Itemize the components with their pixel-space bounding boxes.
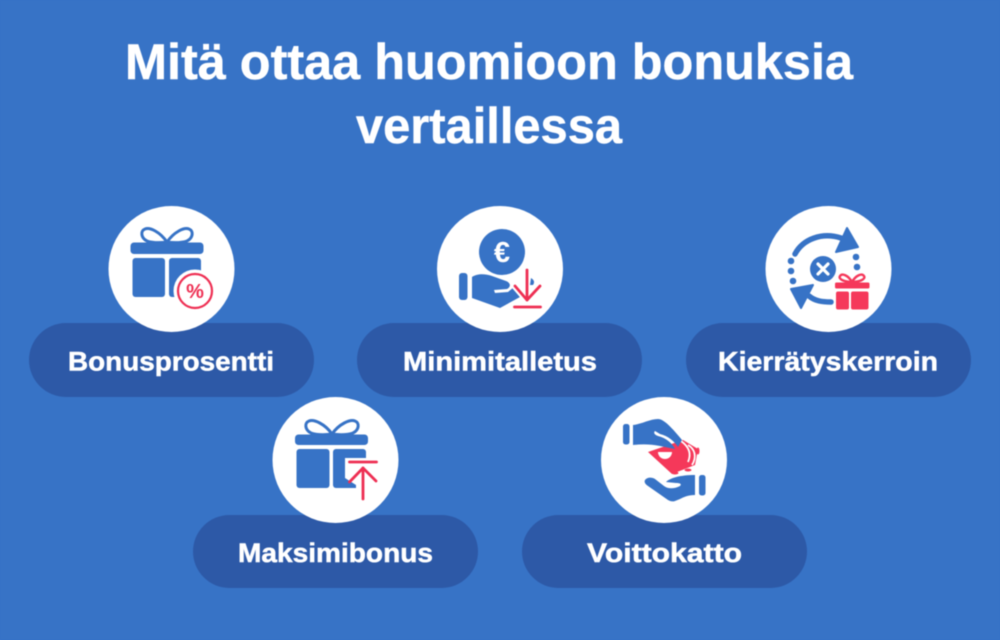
panel: Kierrätyskerroin	[686, 206, 971, 397]
icon: hand with euro coin and down arrow	[437, 206, 563, 332]
icon: hand with euro coin and down arrow: €	[494, 237, 510, 269]
panel: Bonusprosentti	[29, 206, 314, 397]
panel: Voittokatto	[522, 397, 807, 588]
icon: rollover arrows with gift	[766, 206, 892, 332]
label pill: Kierrätyskerroin	[686, 323, 971, 397]
panel: Minimitalletus	[357, 206, 642, 397]
icon: gift with percent badge: %	[186, 281, 204, 303]
icon: hands passing winnings	[601, 397, 727, 523]
label pill: Bonusprosentti	[29, 323, 314, 397]
panel: Maksimibonus	[193, 397, 478, 588]
title	[125, 34, 854, 154]
label pill: Voittokatto	[522, 515, 807, 588]
label pill: Kierrätyskerroin: Kierrätyskerroin	[718, 346, 938, 376]
label pill: Voittokatto: Voittokatto	[587, 538, 742, 568]
title: vertaillessa	[356, 98, 623, 154]
title: Mitä ottaa huomioon bonuksia	[125, 34, 854, 90]
icon: gift with percent badge	[108, 206, 234, 332]
label pill: Maksimibonus: Maksimibonus	[238, 538, 433, 568]
label pill: Minimitalletus: Minimitalletus	[403, 346, 597, 376]
icon: gift with up arrow	[272, 397, 398, 523]
label pill: Maksimibonus	[193, 515, 478, 588]
label pill: Bonusprosentti: Bonusprosentti	[68, 346, 274, 376]
label pill: Minimitalletus	[357, 323, 642, 397]
